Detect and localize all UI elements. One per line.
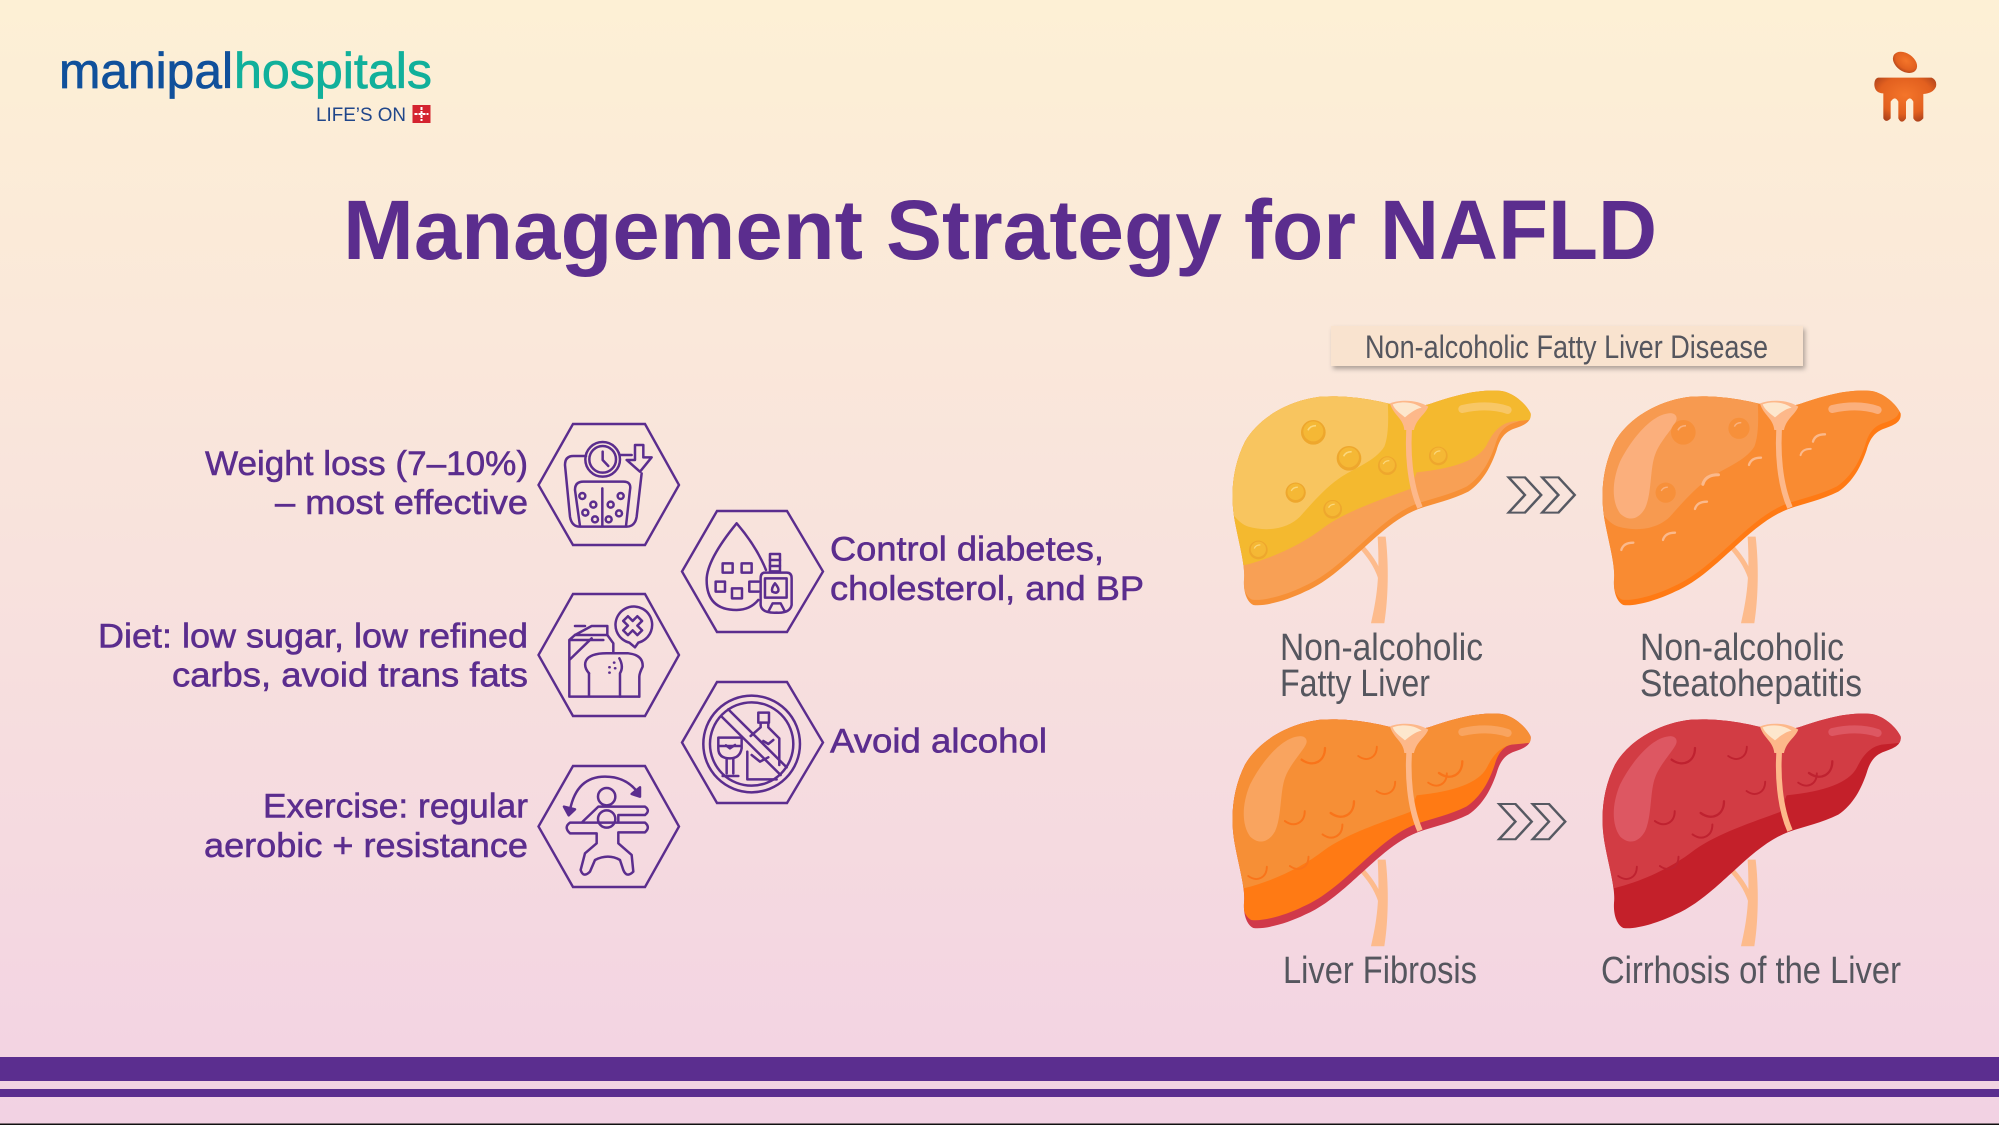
arrow: chevrons to steatohepatitis — [1509, 477, 1575, 513]
strategy: diet: Diet: low sugar, low refined — [98, 618, 528, 656]
strategy: diet — [98, 594, 679, 716]
strategy: diet: carbs, avoid trans fats — [172, 656, 528, 694]
heading box: Non-alcoholic Fatty Liver Disease: Non-alcoholic Fatty Liver Disease — [1365, 329, 1768, 365]
strategy: avoid alcohol: Avoid alcohol — [830, 722, 1047, 760]
strategy: control diabetes — [682, 511, 1144, 632]
arrow: chevrons to cirrhosis — [1499, 804, 1565, 839]
footer bands — [0, 1057, 1999, 1125]
panel: disease progression — [1225, 326, 1915, 992]
icon: orange pillar emblem — [1874, 47, 1936, 122]
logo: manipal hospitals: hospitals — [234, 43, 432, 99]
label: Non-alcoholic Steatohepatitis — [1640, 627, 1862, 705]
label: Non-alcoholic Fatty Liver: Non-alcoholic — [1280, 627, 1483, 669]
title: for — [1244, 183, 1356, 277]
strategy: avoid alcohol — [682, 682, 1047, 803]
liver: steatohepatitis — [1595, 385, 1901, 623]
strategy: exercise: aerobic + resistance — [204, 827, 528, 865]
strategy: control diabetes: Control diabetes, — [830, 530, 1104, 568]
label: Liver Fibrosis: Liver Fibrosis — [1283, 950, 1477, 992]
logo: manipal hospitals: manipal — [59, 43, 233, 99]
logo: manipal hospitals — [59, 43, 432, 126]
liver: cirrhosis — [1595, 708, 1915, 946]
panel: strategies — [98, 424, 1144, 887]
label: Cirrhosis of the Liver: Cirrhosis of the Liver — [1601, 950, 1901, 992]
label: Non-alcoholic Steatohepatitis: Steatohepatitis — [1640, 663, 1862, 705]
label: Non-alcoholic Fatty Liver: Fatty Liver — [1280, 663, 1430, 705]
title — [343, 183, 1657, 277]
title: Management — [343, 183, 863, 277]
strategy: exercise: Exercise: regular — [263, 788, 528, 826]
strategy: control diabetes: cholesterol, and BP — [830, 570, 1144, 608]
liver: fatty liver — [1225, 385, 1545, 623]
strategy: weight loss — [205, 424, 679, 545]
label: Non-alcoholic Steatohepatitis: Non-alcoholic — [1640, 627, 1844, 669]
strategy: weight loss: Weight loss (7–10%) — [205, 445, 528, 483]
title: Strategy — [886, 183, 1222, 277]
title: NAFLD — [1380, 183, 1657, 277]
logo: manipal hospitals: LIFE’S ON — [316, 105, 406, 126]
label: Non-alcoholic Fatty Liver — [1280, 627, 1483, 705]
strategy: weight loss: – most effective — [275, 484, 528, 522]
strategy: exercise — [204, 766, 679, 887]
liver: fibrosis — [1225, 705, 1545, 946]
